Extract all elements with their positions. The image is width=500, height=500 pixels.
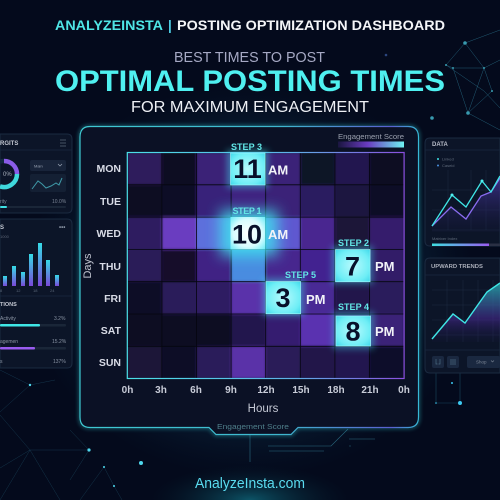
mini line chart — [30, 174, 66, 192]
y axis day labels — [96, 163, 122, 369]
grid — [432, 170, 500, 230]
option: third: 137% — [53, 359, 66, 365]
y axis day labels: SUN — [99, 357, 121, 369]
option: engagement — [0, 339, 67, 350]
step 2: Thursday 7 PM: PM — [375, 259, 394, 274]
panel heading: UPWARD TRENDS — [431, 264, 483, 270]
step 1: Wednesday 10 AM: 10 — [232, 220, 262, 250]
option: activity: 3.2% — [54, 316, 66, 322]
x axis hour labels: 0h — [122, 385, 133, 396]
step 4: Saturday 8 PM: STEP 4 — [338, 302, 369, 312]
option: engagement: 15.2% — [52, 339, 67, 345]
panel heading: DATA — [432, 142, 448, 148]
option: activity — [0, 316, 66, 326]
step 3: Monday 11 AM: 11 — [233, 154, 262, 184]
activity row: 10.0% — [52, 199, 67, 205]
x axis title: Hours — [248, 403, 279, 415]
bar axis labels: 8 — [0, 288, 3, 293]
network decoration bottom left — [0, 370, 143, 500]
y axis day labels: SAT — [101, 325, 122, 337]
x axis hour labels: 0h — [398, 385, 410, 396]
heatmap grid — [127, 142, 404, 379]
progress: Matrixer Index — [432, 236, 457, 241]
x axis hour labels: 12h — [257, 385, 275, 396]
subtitle: FOR MAXIMUM ENGAGEMENT — [131, 99, 370, 116]
header line: POSTING OPTIMIZATION DASHBOARD — [177, 18, 445, 33]
step 2: Thursday 7 PM — [336, 238, 394, 282]
y axis day labels: WED — [96, 228, 121, 240]
step 4: Saturday 8 PM: 8 — [345, 316, 361, 346]
y axis day labels: THU — [99, 261, 121, 273]
panel: left bars and options — [0, 219, 72, 368]
network decoration bottom right — [250, 370, 462, 462]
panel heading: S — [0, 225, 4, 231]
activity row — [0, 199, 67, 208]
panel: left bars and options: ••• — [59, 225, 65, 231]
bar axis labels: 12 — [16, 288, 21, 293]
glow halos — [220, 150, 374, 349]
x axis hour labels: 15h — [292, 385, 310, 396]
y axis title: Days — [82, 253, 94, 279]
title: OPTIMAL POSTING TIMES — [55, 65, 445, 98]
legend: Caseid — [442, 163, 454, 168]
legend — [437, 156, 454, 168]
step 4: Saturday 8 PM: PM — [375, 324, 394, 339]
step 4: Saturday 8 PM — [336, 302, 394, 346]
x axis hour labels: 9h — [225, 385, 237, 396]
header line — [55, 18, 445, 33]
heatmap cells — [127, 152, 404, 379]
panel heading: RGITS — [0, 141, 18, 147]
step 3: Monday 11 AM: STEP 3 — [231, 142, 262, 152]
legend: Linked — [442, 156, 454, 162]
x axis hour labels: 18h — [327, 385, 345, 396]
step 3: Monday 11 AM — [230, 142, 288, 185]
panel: right upward trends — [425, 258, 500, 373]
y axis day labels: FRI — [104, 293, 121, 305]
option: activity: Activity — [0, 316, 16, 322]
step 1: Wednesday 10 AM — [230, 206, 288, 250]
step 2: Thursday 7 PM: STEP 2 — [338, 238, 369, 248]
step 5: Friday 3 PM: PM — [306, 292, 326, 307]
donut chart: 0% — [3, 172, 12, 178]
step 2: Thursday 7 PM: 7 — [345, 252, 360, 282]
option: third: s — [0, 359, 3, 365]
x axis hour labels: 3h — [155, 385, 167, 396]
toolbar: Shop — [476, 360, 487, 364]
chart — [432, 280, 500, 342]
step 5: Friday 3 PM: STEP 5 — [285, 270, 316, 280]
header line: | — [168, 18, 172, 33]
activity row: rity — [0, 199, 7, 205]
kicker: BEST TIMES TO POST — [174, 49, 325, 66]
panel: left bars and options: 1000 — [0, 234, 10, 239]
step 1: Wednesday 10 AM: STEP 1 — [232, 206, 262, 216]
bar chart — [3, 243, 59, 286]
legend: engagement score: Engagement Score — [338, 132, 404, 141]
network decoration top right — [385, 30, 500, 130]
bar axis labels: 24 — [50, 288, 55, 293]
step 1: Wednesday 10 AM: AM — [268, 227, 288, 242]
x axis hour labels — [122, 385, 410, 396]
dropdown: Main — [34, 164, 43, 168]
panel: left top insights — [0, 134, 72, 213]
step 5: Friday 3 PM — [266, 270, 326, 314]
legend: engagement score — [338, 132, 404, 148]
footer url: AnalyzeInsta.com — [195, 476, 305, 492]
header line: ANALYZEINSTA — [55, 18, 163, 33]
x axis hour labels: 21h — [361, 385, 379, 396]
bar axis labels — [0, 288, 55, 293]
y axis day labels: MON — [96, 163, 121, 175]
panel: right data — [425, 138, 500, 246]
option: third — [0, 359, 66, 365]
notch label: Engagement Score — [217, 422, 289, 431]
step 5: Friday 3 PM: 3 — [275, 283, 291, 313]
bar axis labels: 18 — [33, 288, 38, 293]
option: engagement: agemen — [0, 339, 18, 345]
grid outline — [127, 152, 404, 378]
step 3: Monday 11 AM: AM — [268, 162, 288, 178]
x axis hour labels: 6h — [190, 385, 202, 396]
y axis day labels: TUE — [100, 196, 121, 208]
area line chart — [432, 176, 500, 232]
options heading: TIONS — [0, 302, 17, 308]
